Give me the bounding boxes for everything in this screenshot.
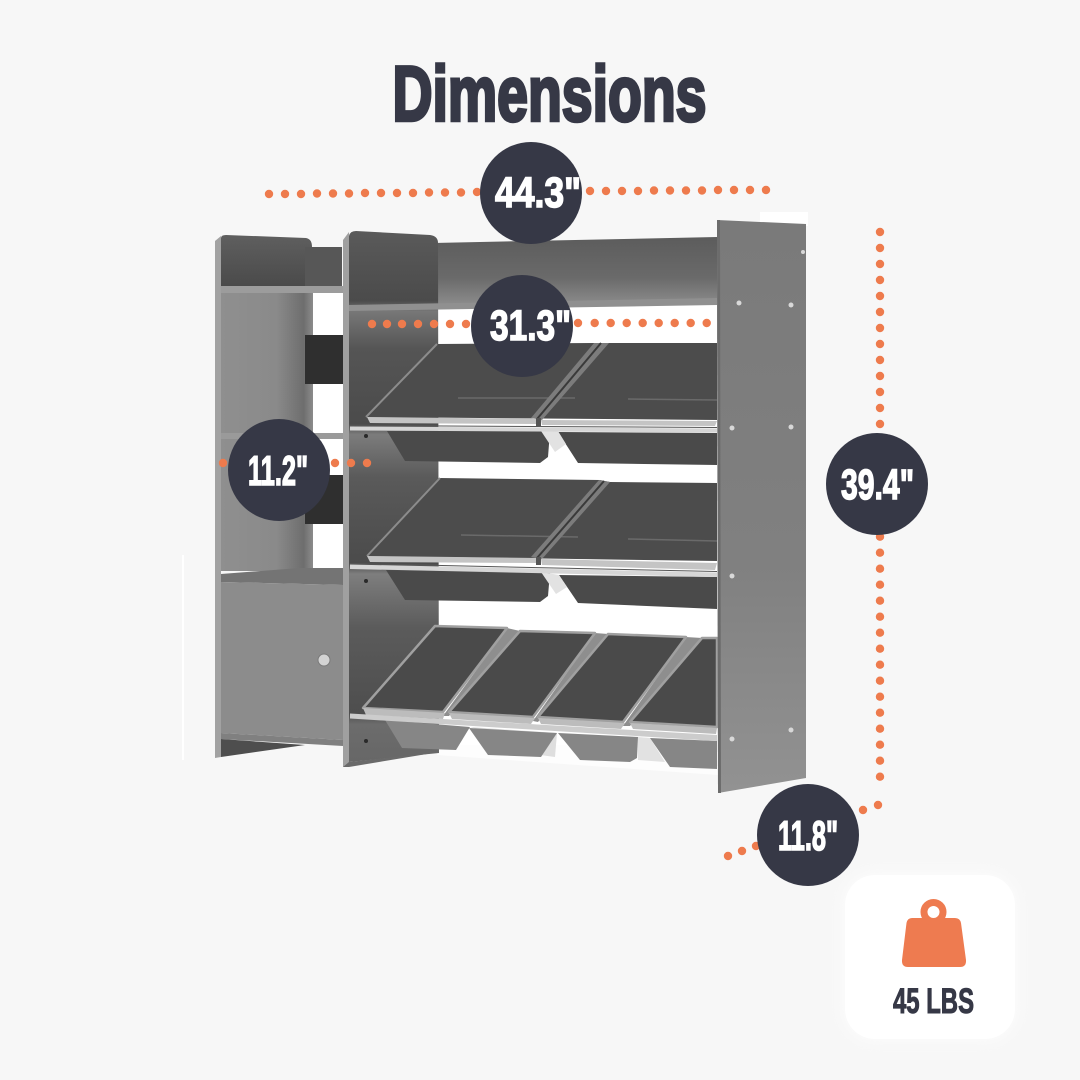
top shelf rail xyxy=(349,298,717,311)
badge: 31.3 inches xyxy=(471,275,573,377)
badge: 44.3 inches: 44.3" xyxy=(495,169,581,217)
dotted line: inner width xyxy=(368,319,711,328)
badge: 39.4 inches: 39.4" xyxy=(841,461,914,509)
badge: 31.3 inches: 31.3" xyxy=(490,302,571,350)
left unit: cabinet door xyxy=(221,582,343,757)
weight label: 45 LBS xyxy=(893,982,974,1021)
dotted line: overall width xyxy=(265,186,770,198)
badge: 11.2 inches: 11.2" xyxy=(248,447,308,494)
badge: 44.3 inches xyxy=(480,142,582,244)
dotted line: depth xyxy=(724,801,882,860)
top back panel xyxy=(433,237,717,305)
bin row 3 xyxy=(350,626,717,769)
title: Dimensions xyxy=(392,50,706,138)
weight card xyxy=(841,871,1019,1043)
left unit: front edge xyxy=(215,236,221,758)
dotted line: height xyxy=(876,228,884,781)
dotted line: side unit depth xyxy=(219,459,371,467)
bin row 1 xyxy=(350,343,717,465)
door knob xyxy=(318,654,330,666)
badge: 11.8 inches: 11.8" xyxy=(778,812,838,859)
product photo: grey storage shelf with bins xyxy=(182,212,808,793)
center divider panel xyxy=(343,231,439,767)
badge: 39.4 inches xyxy=(826,433,928,535)
right side panel xyxy=(717,220,806,793)
badge: 11.8 inches xyxy=(757,784,859,886)
left unit: back and compartments xyxy=(221,235,343,585)
badge: 11.2 inches xyxy=(228,419,330,521)
white backdrop behind shelf xyxy=(182,212,808,775)
bin row 2 xyxy=(350,478,717,609)
icon: weight xyxy=(902,902,966,967)
